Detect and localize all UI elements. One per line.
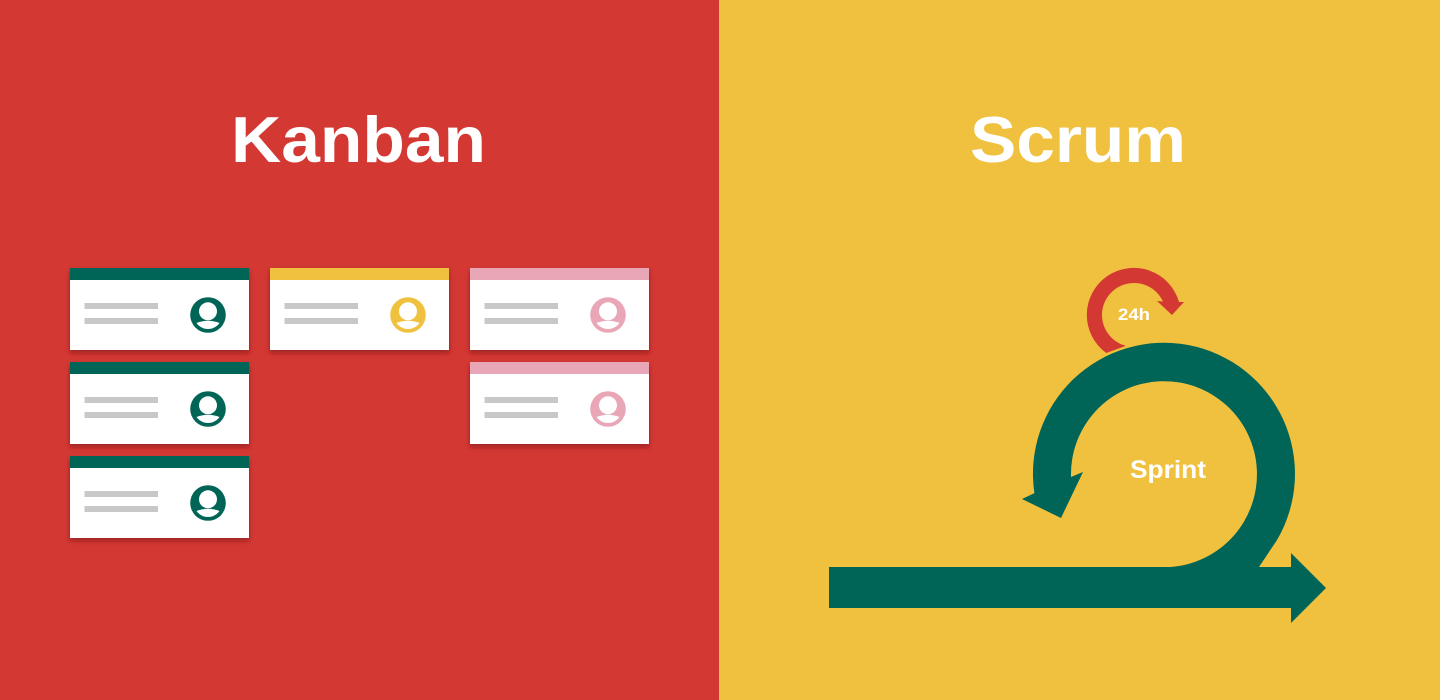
- arrow: green straight process arrow: [829, 553, 1326, 623]
- kanban card: column 1 row 1: [70, 268, 249, 350]
- icon: avatar green: [190, 297, 226, 333]
- icon: avatar green: [190, 391, 226, 427]
- kanban card: column 1 row 3: [70, 456, 249, 538]
- icon: avatar pink: [590, 297, 626, 333]
- icon: avatar pink: [590, 391, 626, 427]
- icon: avatar green: [190, 485, 226, 521]
- heading: Scrum: Scrum: [970, 103, 1186, 176]
- kanban card: column 2 row 1: [270, 268, 449, 350]
- kanban card: column 1 row 2: [70, 362, 249, 444]
- label: 24h: 24h: [1118, 305, 1150, 324]
- kanban card: column 3 row 1: [470, 268, 649, 350]
- kanban card: column 3 row 2: [470, 362, 649, 444]
- panel: Scrum background: [719, 0, 1440, 700]
- heading: Kanban: Kanban: [231, 103, 486, 176]
- arrow: green sprint loop: [1022, 343, 1295, 567]
- icon: avatar yellow: [390, 297, 426, 333]
- arrow: red 24h daily cycle: [1087, 268, 1184, 353]
- panel: Kanban background: [0, 0, 719, 700]
- label: Sprint: Sprint: [1130, 456, 1207, 484]
